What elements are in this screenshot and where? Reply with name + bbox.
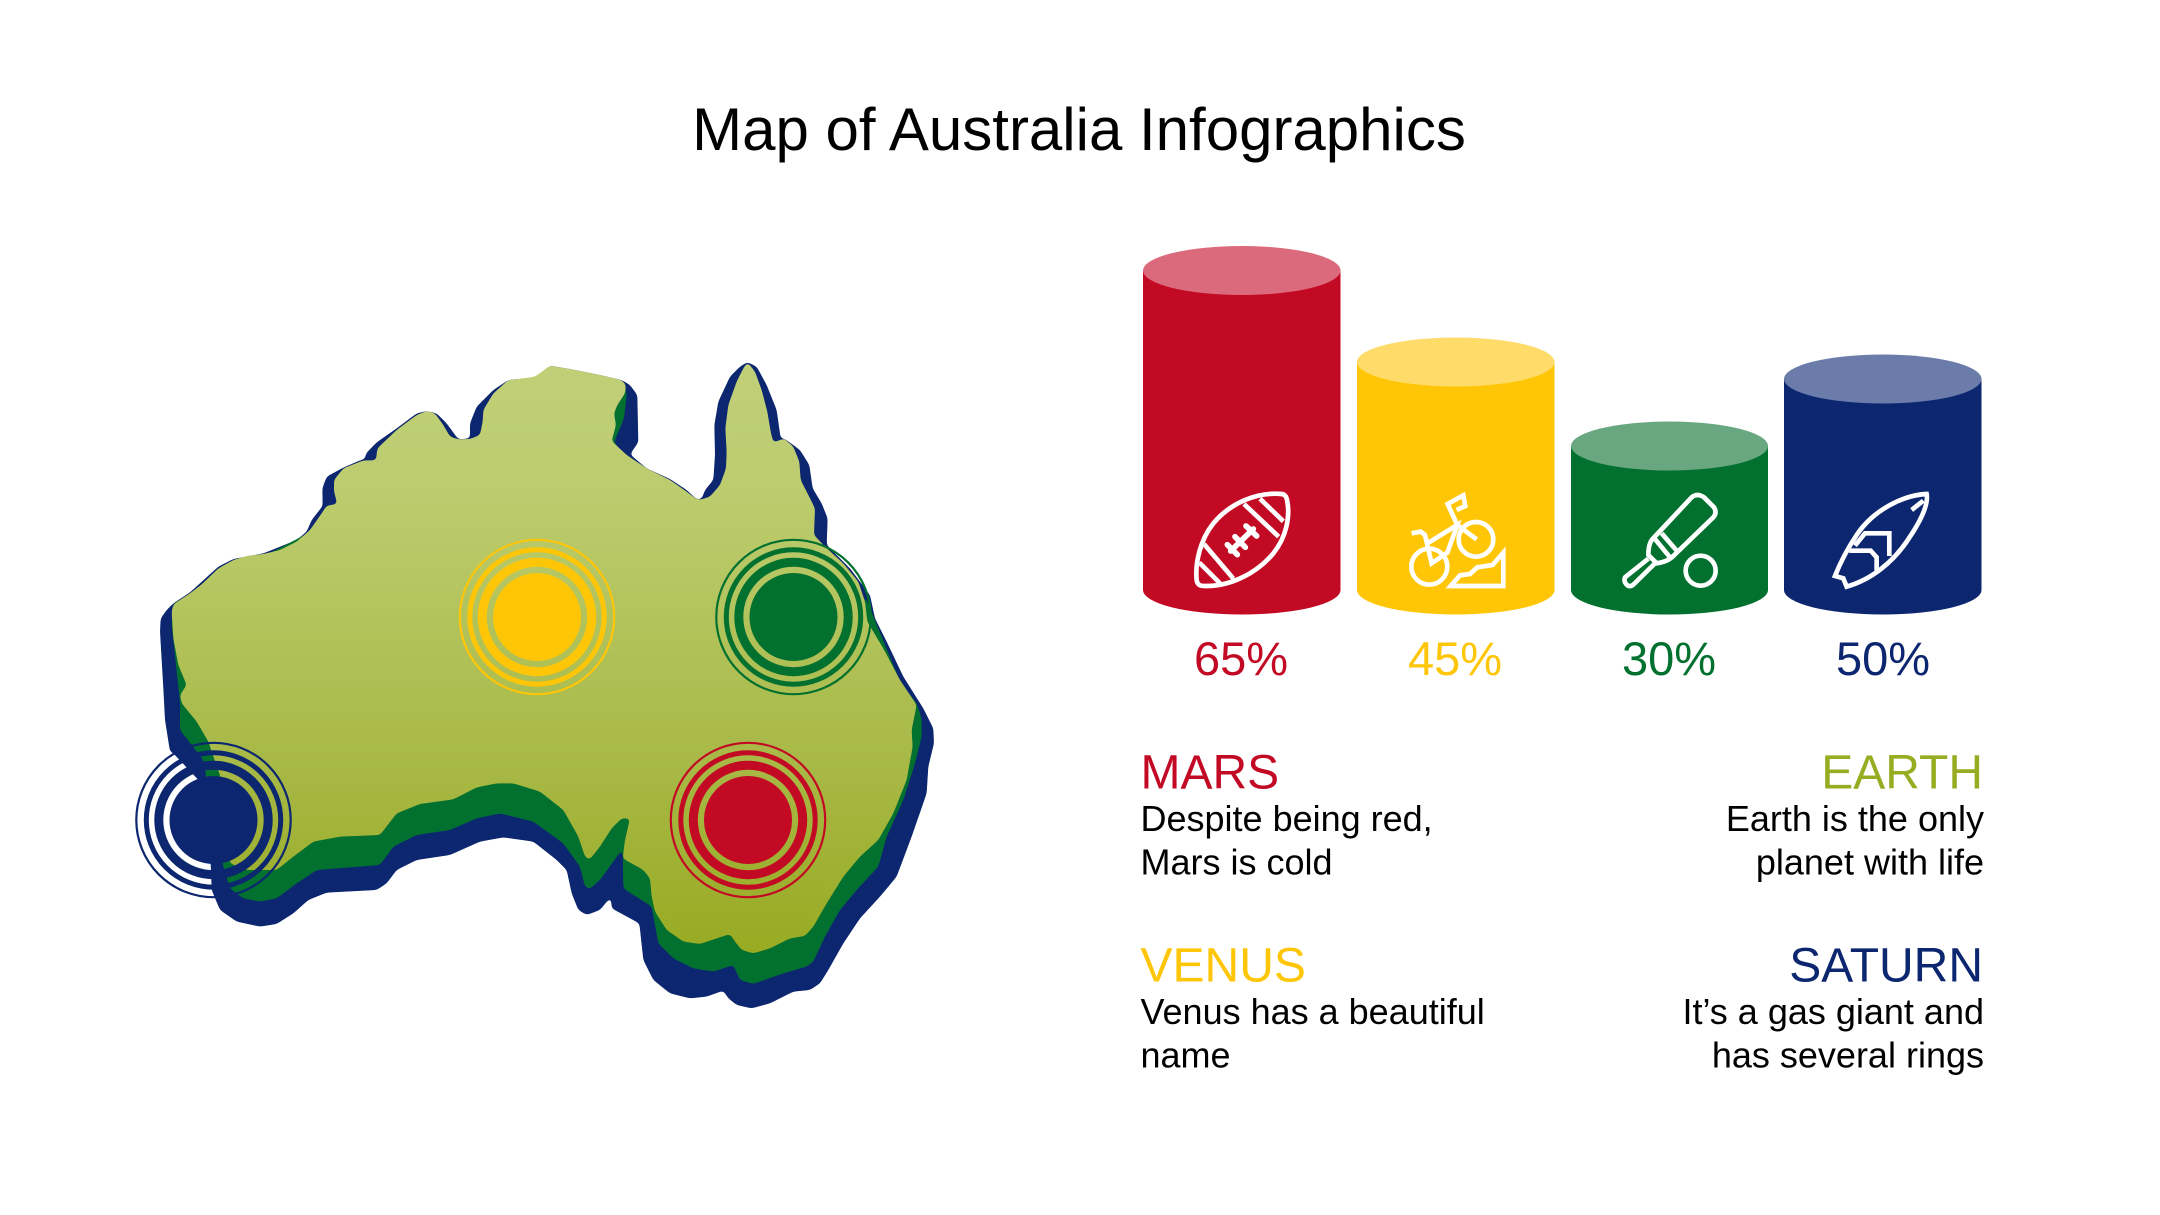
text block: Earth <box>1726 746 1984 882</box>
text block: Venus <box>1140 940 1485 1076</box>
text block: Saturn: has several rings <box>1712 1034 1984 1076</box>
map of Australia <box>136 362 934 1008</box>
cylinder: navy 50% <box>1784 354 1982 614</box>
icon: cricket bat and ball <box>1625 495 1716 586</box>
map land surface <box>172 362 917 953</box>
text block: Venus: Venus has a beautiful <box>1140 991 1485 1032</box>
value: 65%: 65% <box>1194 632 1288 685</box>
map pin: green <box>716 540 871 694</box>
cylinder: red 65% <box>1143 246 1340 614</box>
text block: Saturn: SATURN <box>1789 940 1983 992</box>
text block: Saturn <box>1682 940 1984 1076</box>
icon: surfboard <box>1835 494 1927 587</box>
icon: football <box>1196 494 1288 586</box>
cylinder chart <box>1143 246 1982 614</box>
icon: bicycle and mountain <box>1411 495 1503 586</box>
text block: Mars: MARS <box>1140 746 1279 800</box>
text block: Mars: Despite being red, <box>1140 798 1433 839</box>
text block: Venus: name <box>1140 1034 1231 1076</box>
text block: Mars <box>1140 746 1433 882</box>
value: 30%: 30% <box>1622 632 1716 685</box>
text block: Earth: EARTH <box>1821 746 1983 800</box>
cylinder: green 30% <box>1571 422 1768 614</box>
value: 50%: 50% <box>1836 632 1930 685</box>
map shadow: green layer <box>172 383 922 984</box>
map pin: red <box>671 743 825 897</box>
text block: Earth: planet with life <box>1756 842 1984 882</box>
map shadow: navy layer <box>160 362 934 1008</box>
map pin: yellow <box>460 540 614 694</box>
text block: Venus: VENUS <box>1140 940 1306 992</box>
title: Map of Australia Infographics <box>692 96 1466 163</box>
cylinder: yellow 45% <box>1357 338 1554 614</box>
text block: Earth: Earth is the only <box>1726 798 1984 839</box>
text block: Mars: Mars is cold <box>1140 842 1333 882</box>
text block: Saturn: It’s a gas giant and <box>1682 991 1984 1032</box>
value: 45%: 45% <box>1408 632 1502 685</box>
value labels <box>1194 632 1930 685</box>
map pin: navy <box>136 743 291 897</box>
